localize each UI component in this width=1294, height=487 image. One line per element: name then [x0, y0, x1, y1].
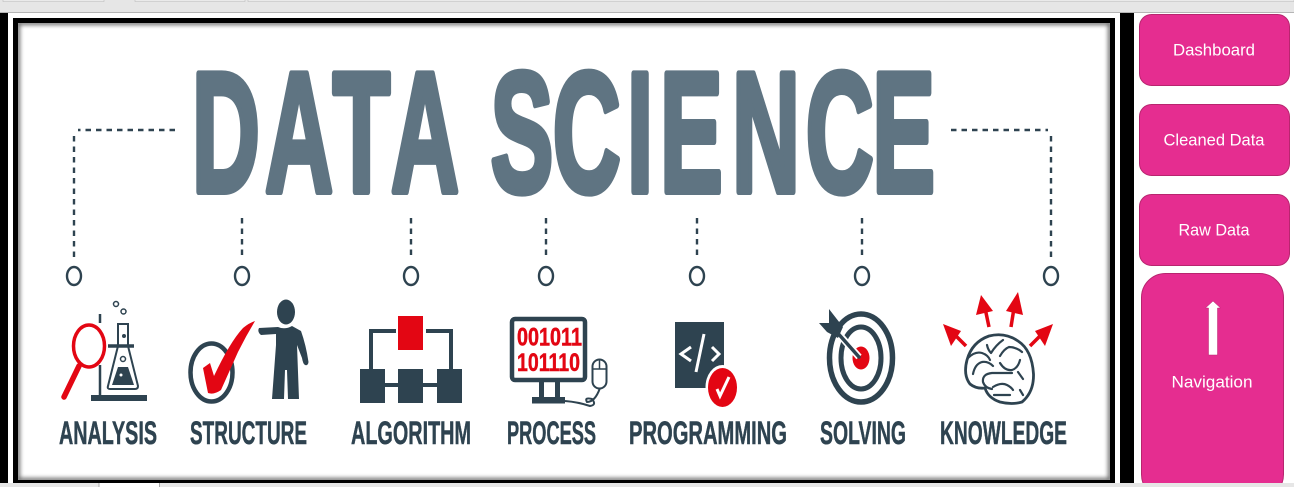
label: process: PROCESS — [507, 415, 596, 451]
button: raw data: Raw Data — [1178, 222, 1250, 240]
icon: process: 101110 — [517, 349, 580, 377]
title: DATA SCIENCE — [192, 38, 935, 229]
button: cleaned data — [1140, 104, 1290, 176]
connector end circles — [67, 267, 1058, 285]
icon: structure — [190, 300, 308, 402]
icon: programming — [675, 322, 740, 409]
spreadsheet bottom bar — [0, 483, 1294, 487]
button: raw data — [1140, 194, 1290, 266]
icon: process — [512, 319, 606, 406]
spreadsheet top bar — [0, 0, 1294, 13]
dashed connectors — [74, 130, 1051, 258]
icon: analysis — [64, 302, 147, 401]
label: algorithm: ALGORITHM — [351, 415, 471, 451]
button: dashboard — [1140, 14, 1290, 86]
button: dashboard: Dashboard — [1173, 42, 1255, 60]
label: knowledge: KNOWLEDGE — [940, 415, 1067, 451]
right black margin — [1120, 13, 1134, 483]
left black margin — [0, 13, 8, 483]
icon: solving — [819, 309, 892, 402]
label: structure: STRUCTURE — [190, 415, 307, 451]
icon: knowledge — [943, 292, 1053, 404]
label: programming: PROGRAMMING — [629, 415, 787, 451]
button: navigation — [1142, 274, 1284, 487]
label: analysis: ANALYSIS — [59, 415, 157, 451]
icon: process: 001011 — [517, 324, 582, 352]
label: solving: SOLVING — [820, 415, 906, 451]
arrow: navigation up — [1206, 301, 1220, 355]
icon: algorithm — [360, 316, 462, 403]
button: navigation: Navigation — [1172, 374, 1252, 392]
button: cleaned data: Cleaned Data — [1164, 132, 1265, 150]
